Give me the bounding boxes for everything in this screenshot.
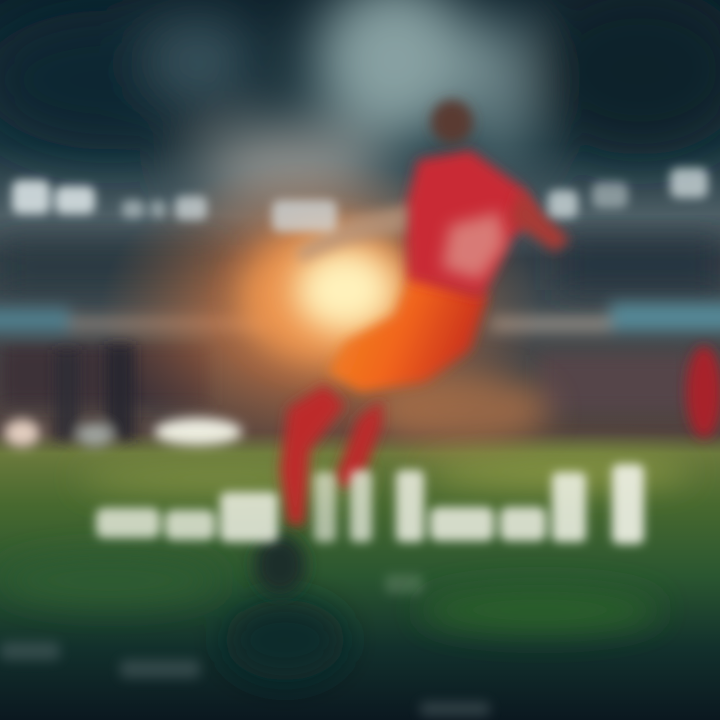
pitch highlights (0, 458, 690, 680)
player arm left (296, 205, 408, 262)
player head (431, 100, 473, 144)
background player on the right (686, 346, 720, 438)
blurred headline row (12, 168, 708, 232)
stands: teal roof strip and crowd (0, 303, 720, 410)
background players on the left (4, 345, 242, 447)
shirt number (442, 212, 505, 280)
blurred footer marks (0, 642, 490, 716)
player: footballer in red and orange kit (254, 100, 570, 595)
sunburst glow behind the player (100, 160, 550, 460)
stands: dark band (0, 240, 720, 290)
player arm right (510, 190, 570, 252)
storm sky with light beams (0, 0, 720, 215)
player legs (280, 385, 382, 525)
player shorts (328, 270, 488, 392)
player torso (405, 150, 535, 298)
blurred large title row (96, 464, 644, 594)
player shoes (254, 535, 306, 595)
